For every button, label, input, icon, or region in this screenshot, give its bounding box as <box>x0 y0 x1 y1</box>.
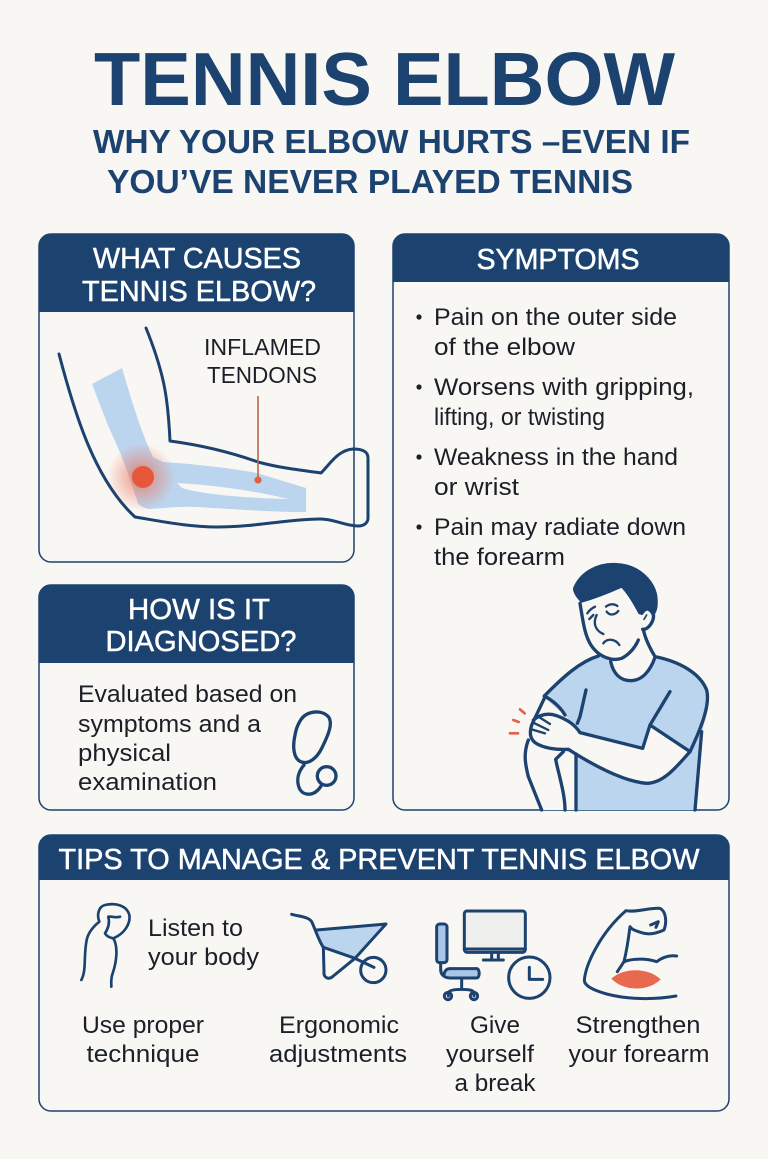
symptom list: Weakness in the hand <box>434 444 678 471</box>
illustration: arm with inflamed tendons: TENDONS <box>207 362 317 388</box>
tip: use proper technique: technique <box>86 1041 200 1068</box>
symptom list: or wrist <box>434 474 519 501</box>
diagnosis text <box>78 681 297 796</box>
panel: tips <box>39 835 729 1111</box>
panel header: diagnosed <box>39 585 354 663</box>
panel header: diagnosed: DIAGNOSED? <box>106 626 296 658</box>
tip: use proper technique: Use proper <box>82 1012 204 1039</box>
panel: what causes tennis elbow <box>39 234 368 562</box>
tip: give yourself a break: Give <box>470 1012 520 1039</box>
icon: flexed arm <box>584 908 677 999</box>
subtitle: WHY YOUR ELBOW HURTS –EVEN IF <box>93 124 690 161</box>
illustration: man holding elbow <box>510 564 708 810</box>
tip: give yourself a break: a break <box>454 1070 536 1097</box>
illustration: arm with inflamed tendons <box>59 328 368 527</box>
symptom list <box>416 304 694 571</box>
leader line <box>257 396 259 480</box>
icon: arm <box>81 904 130 987</box>
symptom list: Pain on the outer side <box>434 304 677 331</box>
panel header: causes <box>39 234 354 312</box>
tip: give yourself a break <box>437 911 550 1097</box>
symptom list: of the elbow <box>434 334 575 361</box>
diagnosis text: Evaluated based on <box>78 681 297 708</box>
tip: give yourself a break: yourself <box>446 1041 534 1068</box>
diagnosis text: examination <box>78 769 217 796</box>
panel header: causes: TENNIS ELBOW? <box>82 276 316 308</box>
icon: desk chair, monitor and clock <box>437 911 550 1000</box>
panel header: tips <box>39 835 729 880</box>
label: inflamed tendons: INFLAMED <box>204 334 321 360</box>
symptom list: Worsens with gripping, <box>434 374 694 401</box>
tip: use proper technique <box>81 904 260 1068</box>
title: TENNIS ELBOW <box>94 37 675 121</box>
subtitle: YOU’VE NEVER PLAYED TENNIS <box>107 164 633 201</box>
panel header: symptoms: SYMPTOMS <box>476 244 640 276</box>
panel: symptoms <box>393 234 729 810</box>
symptom list: the forearm <box>434 544 565 571</box>
panel header: diagnosed: HOW IS IT <box>128 594 270 626</box>
panel header: causes: WHAT CAUSES <box>93 243 301 275</box>
tip: ergonomic adjustments <box>269 914 407 1068</box>
tip: use proper technique: your body <box>148 944 260 971</box>
symptom list: Pain may radiate down <box>434 514 686 541</box>
panel: how is it diagnosed <box>39 585 354 810</box>
symptom list: lifting, or twisting <box>434 404 605 431</box>
tip: strengthen your forearm: your forearm <box>568 1041 710 1068</box>
panel header: tips: TIPS TO MANAGE & PREVENT TENNIS ELBOW <box>58 844 700 876</box>
diagnosis text: physical <box>78 740 171 767</box>
icon: wheelbarrow <box>292 914 386 983</box>
panel header: symptoms <box>393 234 729 282</box>
subtitle <box>93 124 690 201</box>
tip: strengthen your forearm <box>568 908 710 1068</box>
tip: strengthen your forearm: Strengthen <box>576 1012 700 1039</box>
tip text: listen to your body: Listen to <box>148 915 243 942</box>
icon: stethoscope <box>294 712 336 794</box>
tip: ergonomic adjustments: Ergonomic <box>279 1012 399 1039</box>
diagnosis text: symptoms and a <box>78 711 261 738</box>
tip: ergonomic adjustments: adjustments <box>269 1041 407 1068</box>
